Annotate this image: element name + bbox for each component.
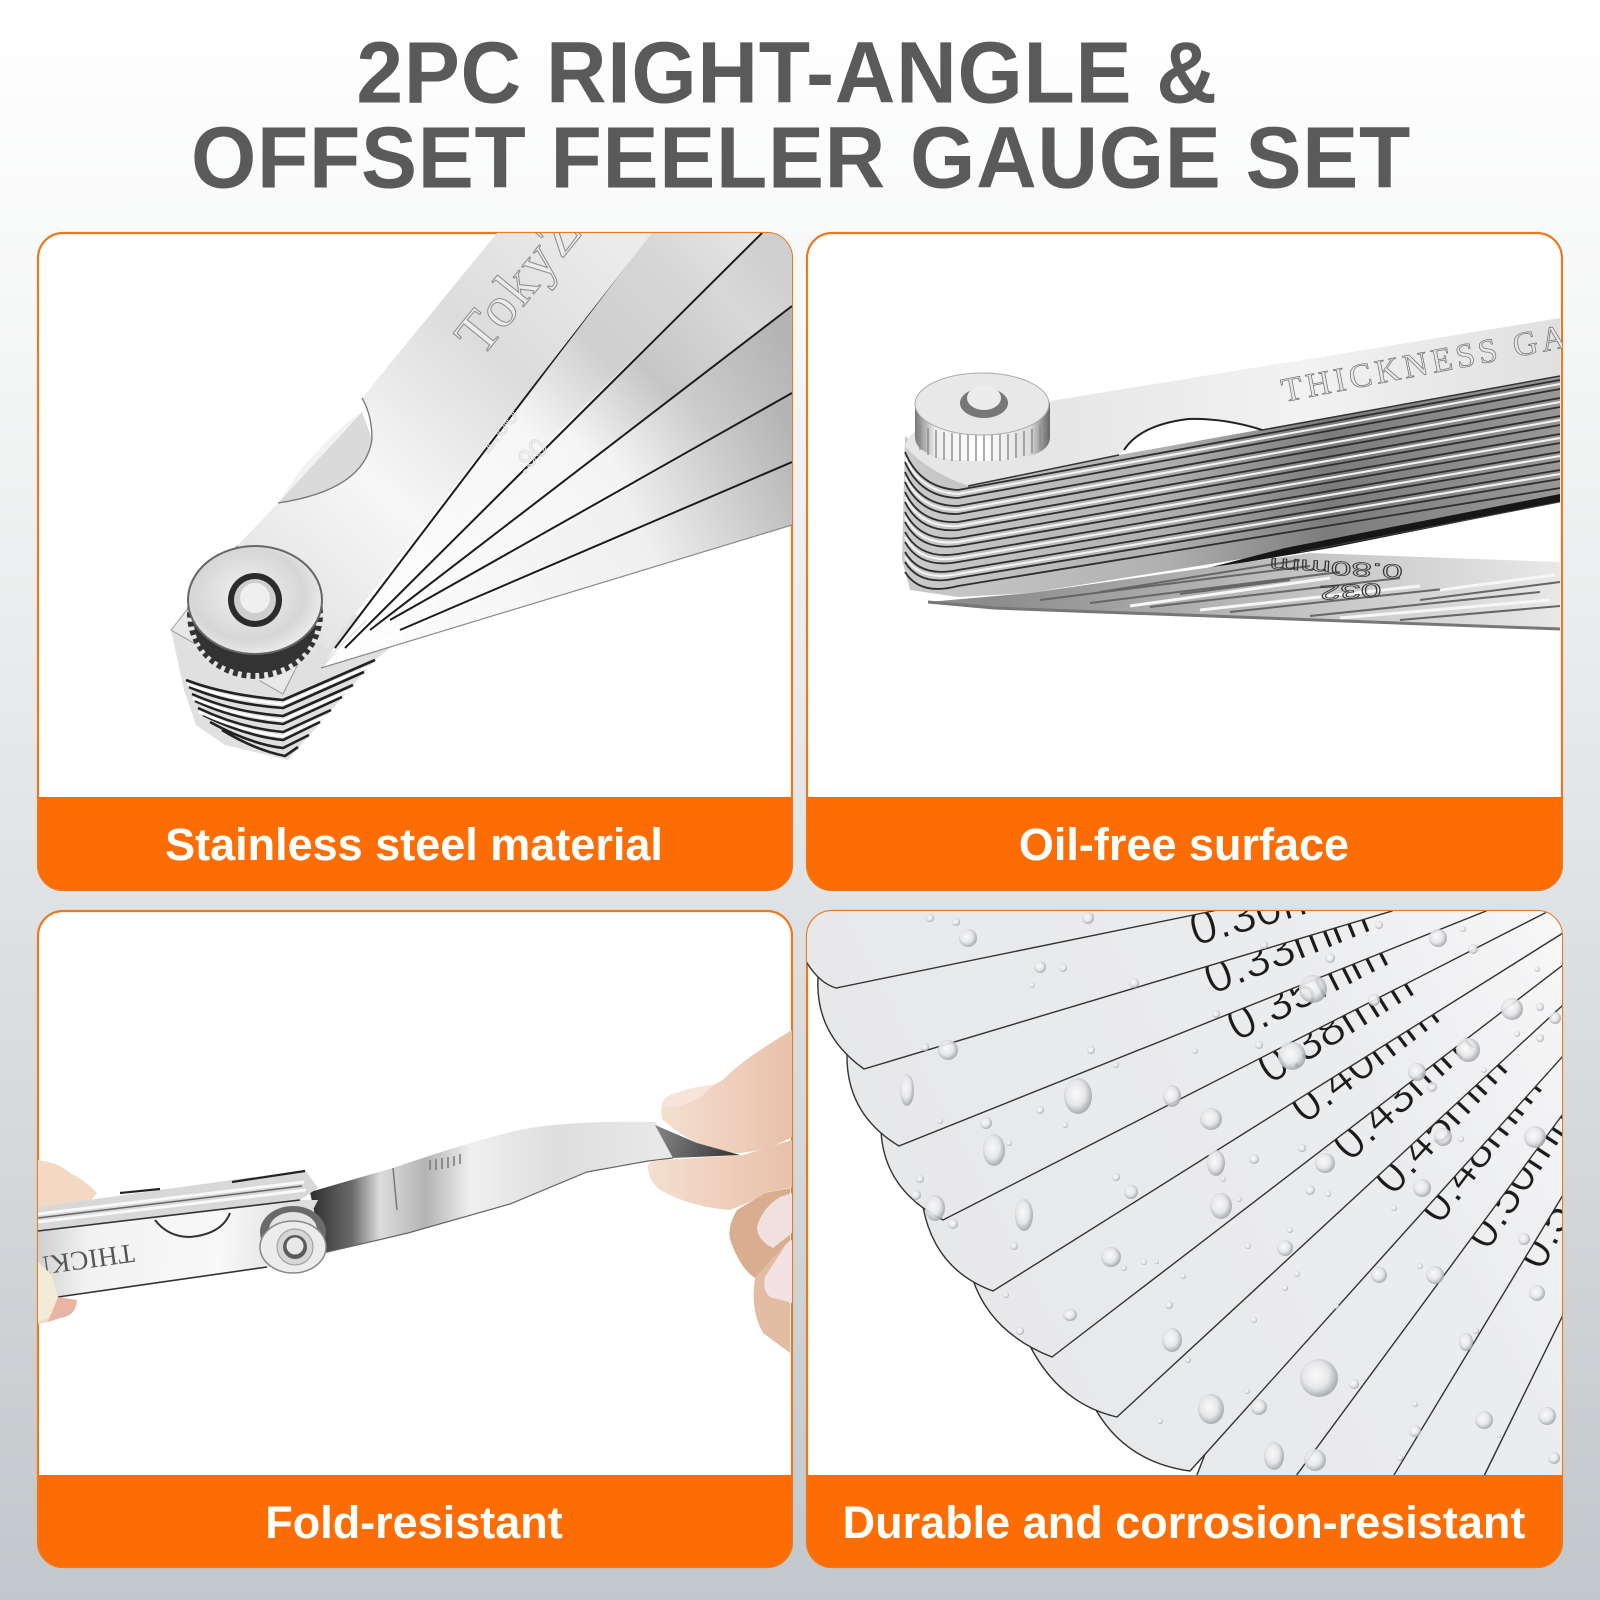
gauge photo: fanned stainless blades xyxy=(170,233,792,760)
engraved brand text: TokyZ xyxy=(442,198,595,366)
water droplets xyxy=(900,912,1561,1471)
stamped size numbers (upside down): 0.80mm xyxy=(1269,553,1403,582)
right hand with thumb and fingers xyxy=(754,1240,790,1353)
worn gauge numbers on the blades: 1.00 xyxy=(469,401,524,459)
worn gauge numbers on the blades: .90 xyxy=(507,432,553,479)
blade end gripped between fingers xyxy=(655,1125,740,1158)
panel 1 card xyxy=(38,233,792,890)
panel 1 caption: Stainless steel material xyxy=(165,819,663,870)
fan of gauge blades with size labels and water droplets: 0.50mm xyxy=(1453,1084,1592,1258)
handle front plate xyxy=(38,1200,318,1297)
gauge photo: closed stack side view xyxy=(902,302,1600,629)
panel 1 caption band xyxy=(38,797,792,890)
panel 3 caption: Fold-resistant xyxy=(265,1497,563,1548)
panel: oil-free surface xyxy=(807,233,1600,890)
panel 3 card xyxy=(38,911,792,1567)
fan of gauge blades with size labels and water droplets: 0.35mm xyxy=(1218,926,1396,1052)
stamped size numbers (upside down): 032 xyxy=(1319,578,1382,604)
handle stack xyxy=(38,1170,318,1232)
panel 2 card xyxy=(807,233,1562,890)
title: OFFSET FEELER GAUGE SET xyxy=(191,110,1411,207)
panel: durable and corrosion-resistant xyxy=(806,910,1564,1568)
panel 2 caption: Oil-free surface xyxy=(1019,819,1349,870)
fan of gauge blades with size labels and water droplets: 0.33mm xyxy=(1196,891,1377,1005)
fan of gauge blades with size labels and water droplets: 0.45mm xyxy=(1362,1041,1518,1204)
fan of gauge blades with size labels and water droplets: 0.40mm xyxy=(1279,986,1449,1134)
left thumb tip xyxy=(38,1262,58,1322)
fan of gauge blades with size labels and water droplets: 0.48mm xyxy=(1406,1062,1553,1233)
panel 2 caption band xyxy=(807,797,1562,890)
photo: hands bending a gauge blade xyxy=(28,1030,792,1353)
panel: stainless steel material xyxy=(36,232,794,892)
panel 4 caption: Durable and corrosion-resistant xyxy=(843,1497,1525,1548)
panel 3 caption band xyxy=(38,1475,792,1567)
title xyxy=(191,25,1411,207)
panel: fold-resistant xyxy=(28,911,792,1567)
fan of gauge blades with size labels and water droplets: 0.38mm xyxy=(1248,957,1423,1094)
worn gauge numbers on the blades xyxy=(486,412,546,474)
pivot screw xyxy=(260,1206,326,1273)
fan of gauge blades with size labels and water droplets xyxy=(807,911,1562,1475)
left hand fingers xyxy=(38,1160,97,1324)
panel 4 caption band xyxy=(807,1475,1562,1567)
engraved upside-down text: THICKN xyxy=(28,1238,136,1282)
knob xyxy=(915,403,1050,461)
panel 4 card xyxy=(807,911,1562,1567)
fan of gauge blades with size labels and water droplets: 0.43mm xyxy=(1321,1014,1484,1171)
stamped size numbers (upside down) xyxy=(1271,558,1402,600)
fan of gauge blades with size labels and water droplets: 0.30mm xyxy=(1183,858,1365,957)
bending blade xyxy=(310,1122,673,1253)
title: 2PC RIGHT-ANGLE & xyxy=(356,25,1218,122)
